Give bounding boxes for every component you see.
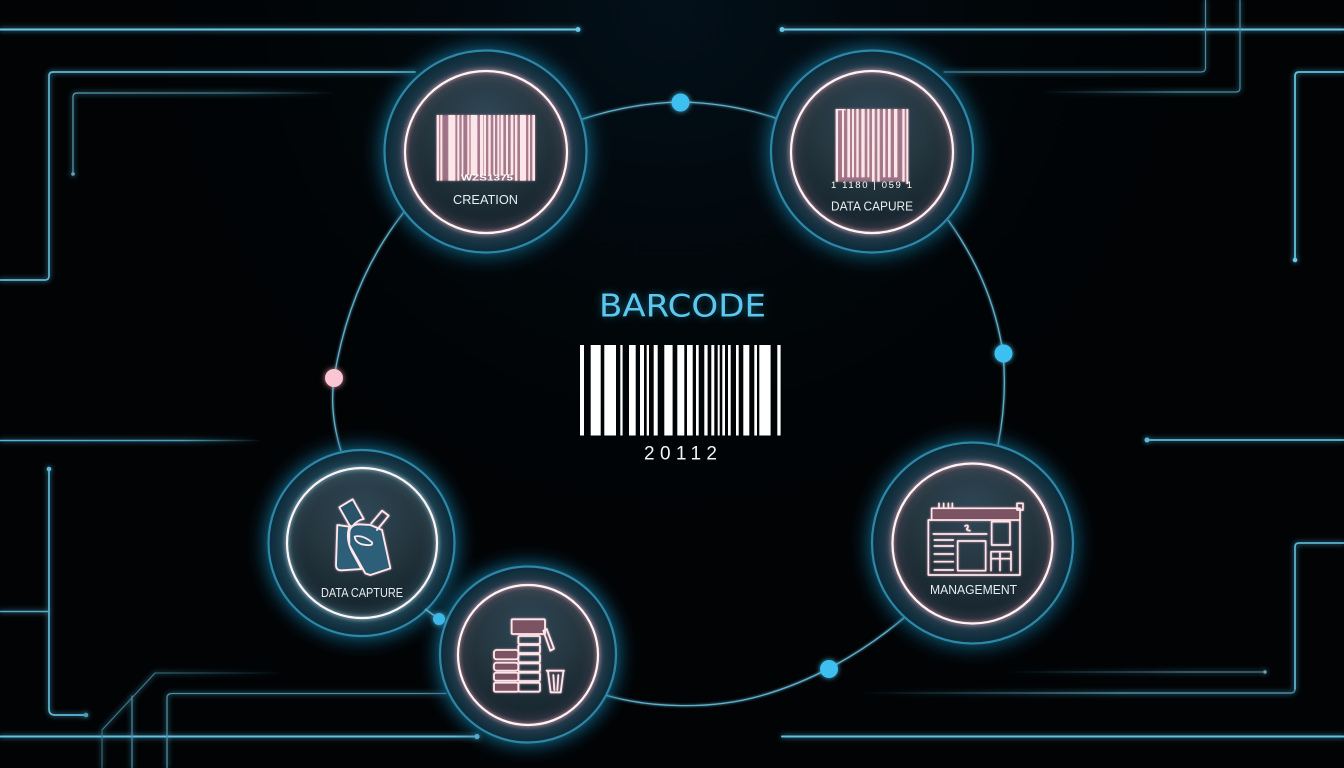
inner ring: [892, 464, 1052, 624]
node: storage: [417, 544, 639, 766]
inner ring: [405, 71, 567, 233]
lifecycle ring connecting the nodes: [333, 102, 1004, 706]
label: CREATION: [453, 193, 518, 207]
barcode digits: 1 1180 | 059 1: [831, 180, 912, 191]
node: management: [848, 418, 1098, 668]
node: data capture top right: [746, 26, 998, 278]
inner ring: [791, 71, 953, 233]
icon: dashboard window: [928, 503, 1023, 575]
marker: right: [994, 344, 1012, 362]
inner ring: [287, 468, 437, 618]
icon: hand-held scanner and tag: [336, 499, 390, 575]
marker: lower left: [433, 613, 445, 625]
label: DATA CAPURE: [831, 200, 913, 214]
central barcode: [580, 345, 781, 436]
label: DATA CAPTURE: [321, 586, 403, 600]
barcode number: 20112: [644, 444, 717, 464]
marker: left pink: [325, 369, 343, 387]
marker: lower left link: [425, 609, 439, 619]
node: data capture left: [244, 426, 478, 660]
title: BARCODE: [599, 288, 766, 324]
marker: lower right: [820, 660, 838, 678]
ring node markers: [425, 94, 1012, 678]
node: creation: [360, 26, 612, 278]
label: MANAGEMENT: [930, 583, 1017, 597]
icon: barcode: [836, 109, 908, 184]
icon: stacked records and bin: [494, 619, 564, 692]
icon: barcode: [437, 115, 535, 181]
barcode digits: WZS1375: [461, 172, 513, 182]
inner ring: [458, 585, 598, 725]
marker: top: [672, 94, 690, 112]
